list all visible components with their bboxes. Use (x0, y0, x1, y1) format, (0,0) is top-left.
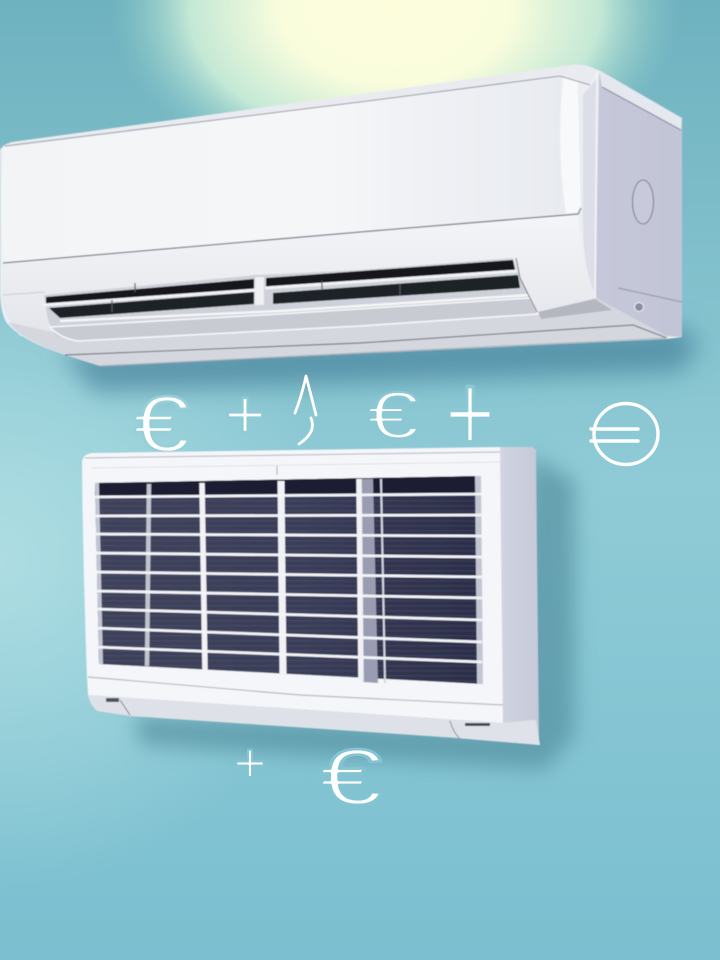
side round cap (632, 180, 654, 224)
plus symbol 1: + (225, 375, 265, 453)
euro symbol 2: € (367, 379, 419, 453)
louver blade (50, 298, 538, 341)
grille window (95, 476, 482, 684)
euro symbol 1: € (133, 380, 190, 468)
icon: circled euro (591, 404, 658, 464)
grille horizontal bars (94, 494, 482, 662)
symbols row (133, 351, 658, 477)
side screw (634, 302, 644, 312)
body silhouette (0, 65, 682, 366)
top unit wall shadow (60, 325, 700, 392)
front cover panel (2, 76, 582, 263)
lower unit side panel (455, 447, 539, 745)
lower front strip (1, 215, 597, 336)
lower unit underside (88, 695, 540, 745)
grille vertical bars (147, 484, 149, 666)
air vent (44, 258, 537, 337)
lower air conditioner unit (82, 447, 540, 745)
icon: upward arrow (295, 376, 316, 444)
plus symbol 2: + (445, 351, 495, 477)
lower unit front frame (82, 447, 503, 723)
euro symbol 3: € (319, 732, 383, 821)
side panel (596, 73, 682, 337)
underside (8, 298, 668, 366)
top air conditioner unit (0, 65, 682, 366)
plus symbol 3: + (234, 731, 266, 794)
top surface (4, 65, 596, 147)
lower unit wall shadow (135, 455, 575, 770)
